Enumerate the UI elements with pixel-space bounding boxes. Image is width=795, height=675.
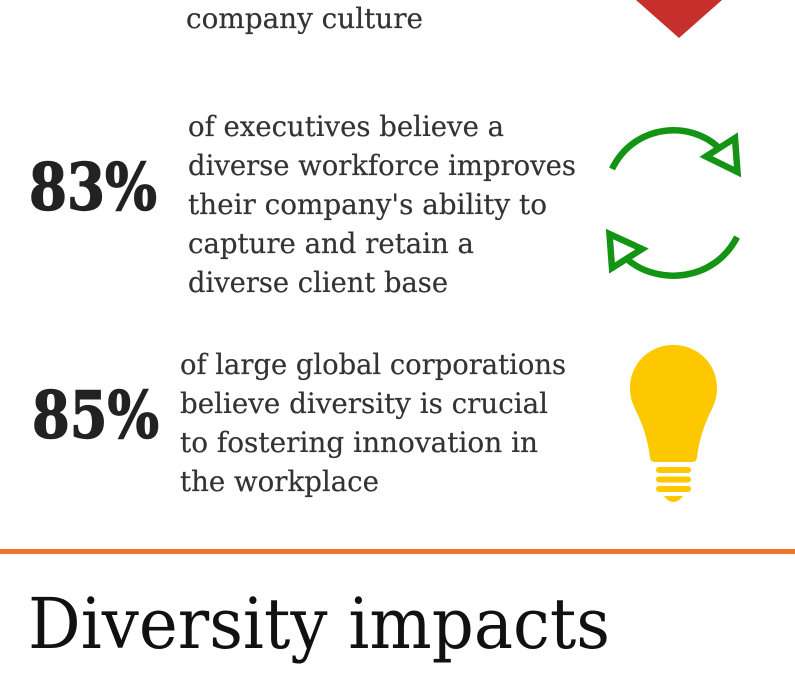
- text: company culture: company culture: [186, 2, 423, 35]
- text block: executives statistic: diverse client base: [188, 266, 448, 299]
- text block: executives statistic: [188, 110, 576, 299]
- text block: executives statistic: of executives believe a: [188, 110, 504, 143]
- text block: executives statistic: their company's ability to: [188, 188, 547, 221]
- icon: green cycle arrows: [610, 130, 738, 276]
- heading: Diversity impacts: Diversity impacts: [28, 583, 610, 665]
- text block: executives statistic: diverse workforce improves: [188, 149, 576, 182]
- text block: corporations statistic: believe diversity is crucial: [180, 387, 548, 420]
- text block: corporations statistic: to fostering innovation in: [180, 426, 538, 459]
- stat: 85%: 85%: [32, 378, 159, 454]
- stat: 83%: 83%: [29, 150, 157, 226]
- text block: executives statistic: capture and retain a: [188, 227, 474, 260]
- icon: red heart: [636, 0, 722, 38]
- orange divider: [0, 549, 795, 554]
- text block: corporations statistic: [180, 348, 566, 498]
- icon: yellow light bulb: [630, 345, 717, 502]
- text block: corporations statistic: the workplace: [180, 465, 379, 498]
- text block: corporations statistic: of large global corporations: [180, 348, 566, 381]
